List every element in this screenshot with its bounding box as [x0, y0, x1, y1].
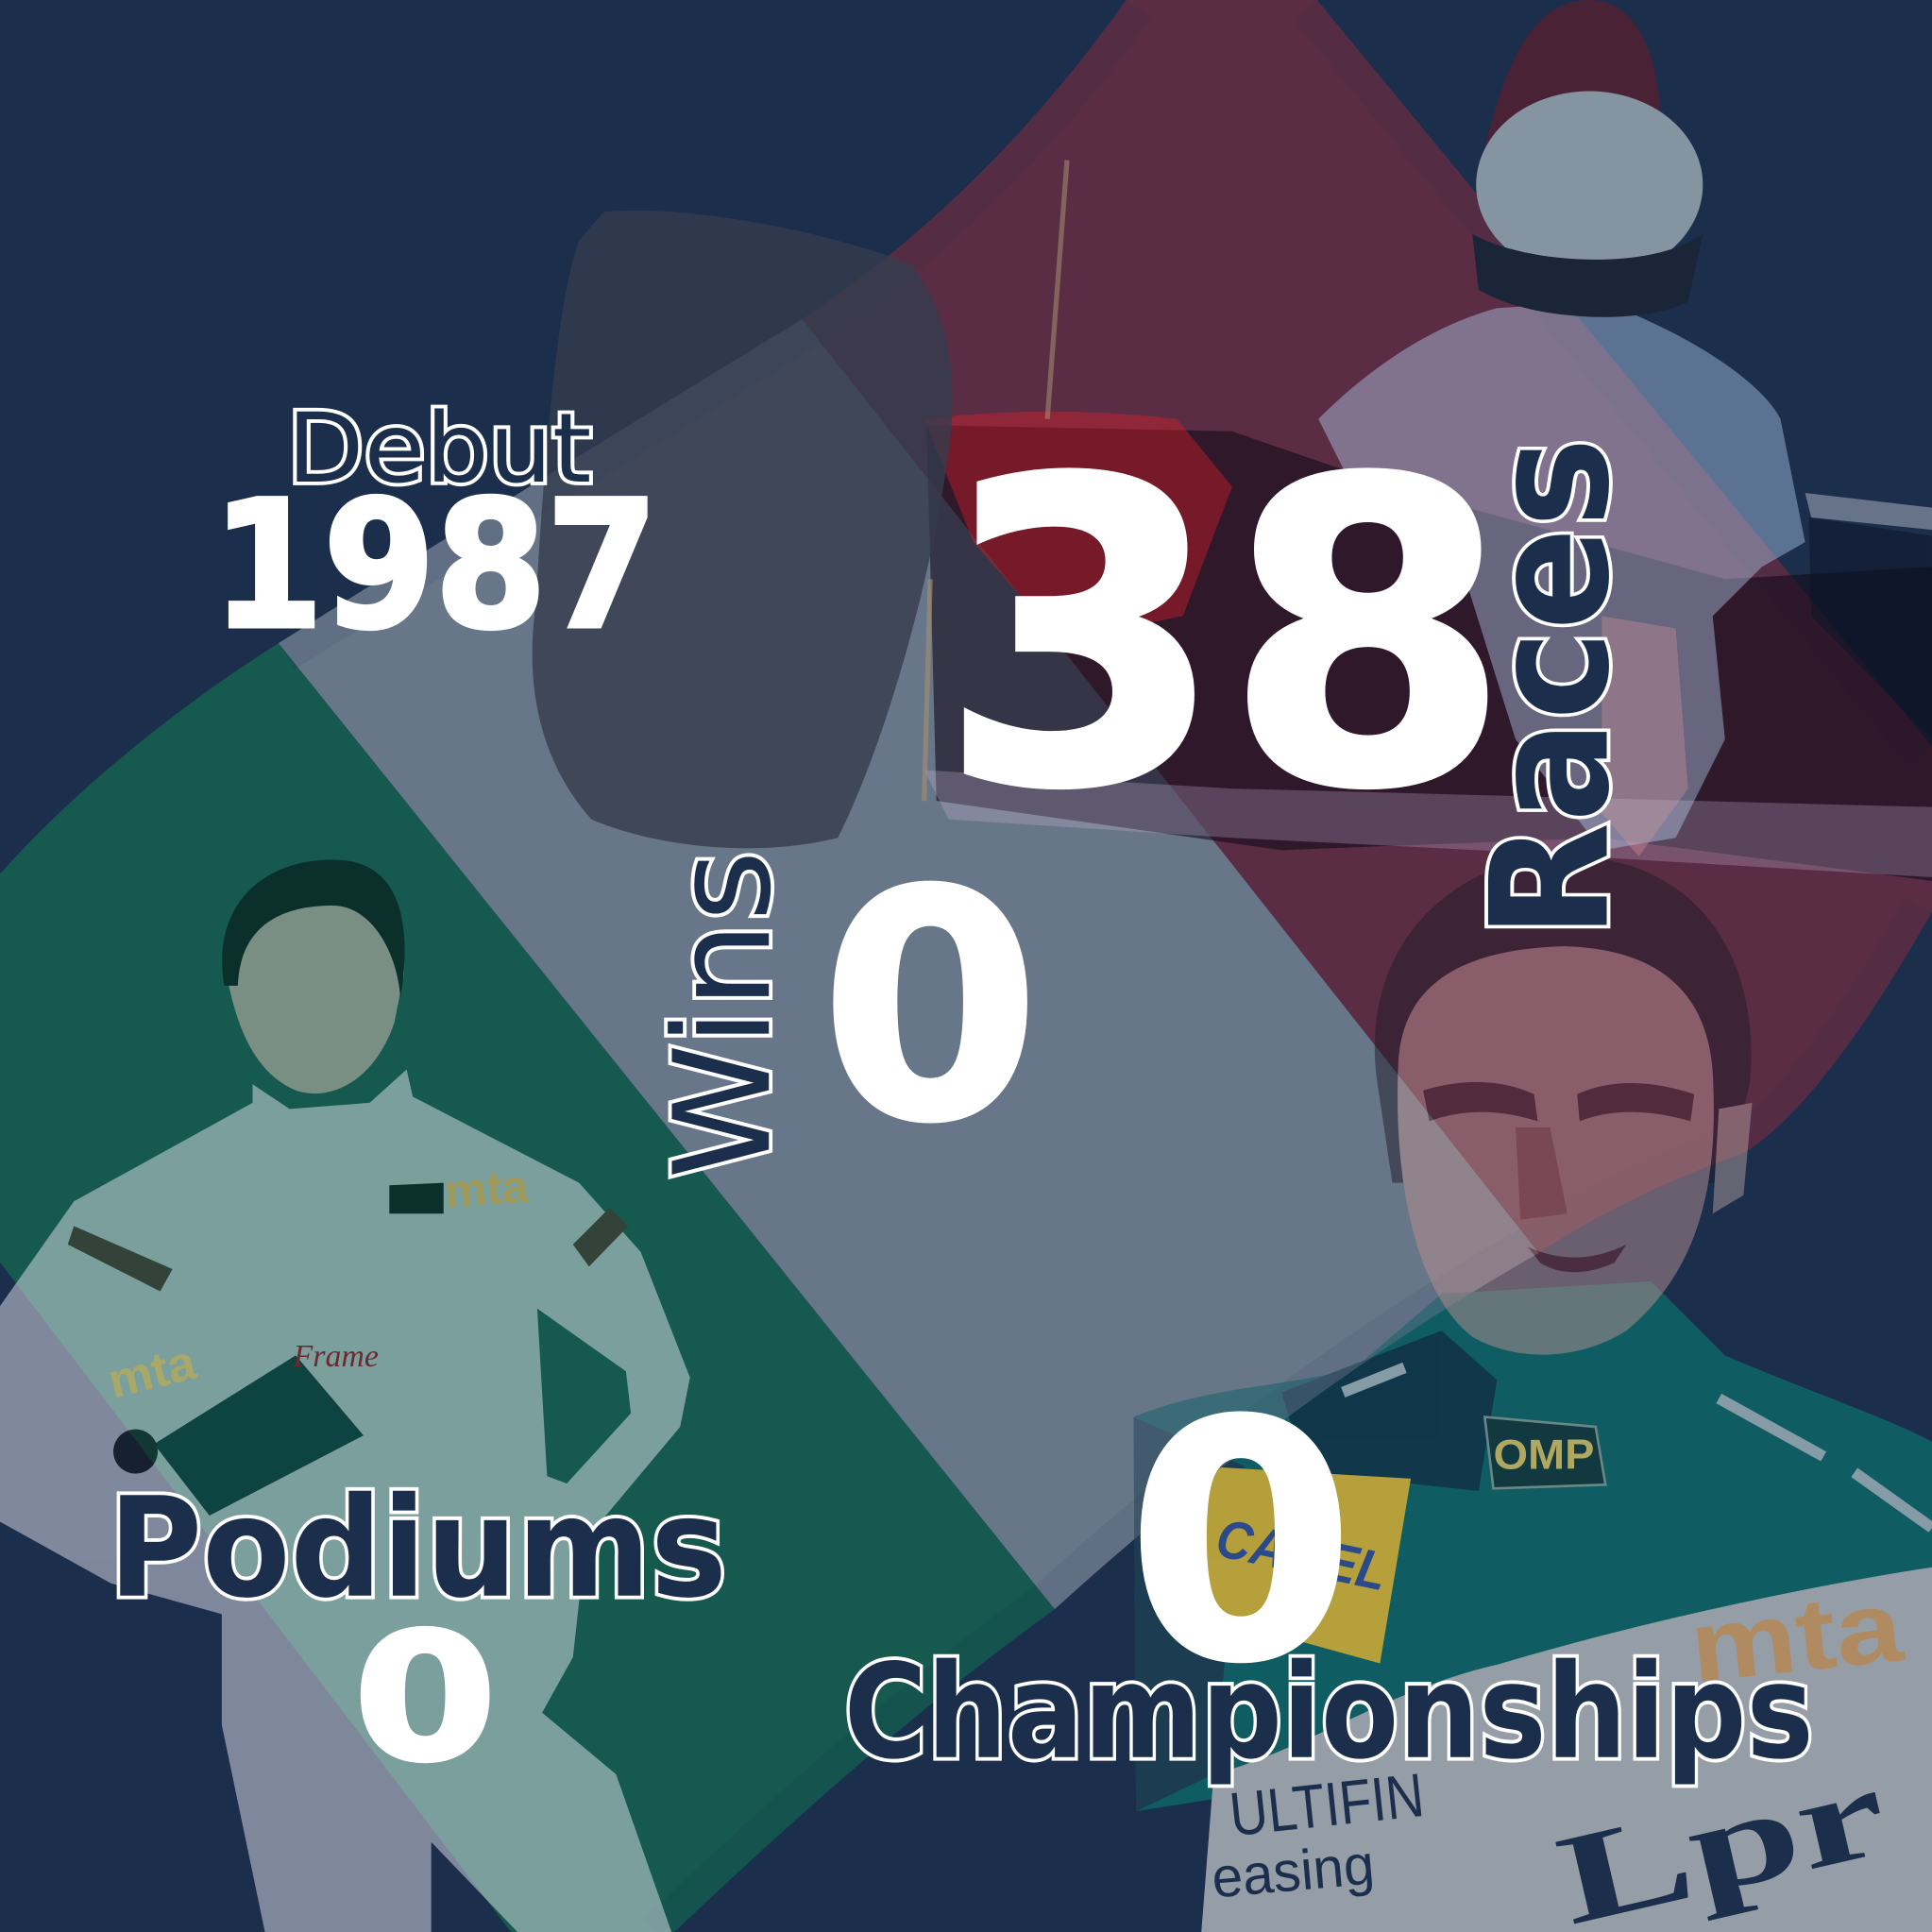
- driver body: [1318, 302, 1805, 850]
- helmet visor: [1472, 234, 1703, 317]
- portrait suit body: [1133, 1281, 1932, 1932]
- head: [224, 862, 404, 1093]
- stat: podiums number: 0: [353, 1596, 497, 1800]
- stat: debut year: 1987: [212, 464, 658, 668]
- tyre: [533, 211, 953, 848]
- photo: portrait head off flag: [1447, 1150, 1748, 1355]
- wing strut lower: [924, 579, 930, 801]
- portrait head off flag image: [1447, 1150, 1748, 1355]
- stat: championships label: Championships: [844, 1636, 1814, 1788]
- photo: portrait suit off flag: [1133, 1281, 1932, 1932]
- portrait sponsor OMP: OMP: [1493, 1432, 1594, 1478]
- arm patch right: [573, 1208, 628, 1266]
- sponsor script: Frame: [293, 1339, 379, 1374]
- rear wing: [1805, 493, 1932, 530]
- car body dark: [926, 425, 1932, 881]
- red front wing: [924, 412, 1232, 641]
- flag outer edge shade: [298, 545, 1414, 1577]
- helmet plume: [1484, 0, 1661, 148]
- flag: green band: [0, 643, 1055, 1932]
- rear dark: [1809, 517, 1932, 739]
- stat: races number: 38: [939, 392, 1511, 880]
- stat: races label: Races: [1456, 437, 1646, 939]
- flag: white band: [279, 319, 1539, 1609]
- hair: [222, 860, 405, 998]
- stat: debut label: Debut: [287, 394, 591, 505]
- portrait suit on flag: [1133, 1292, 1473, 1539]
- stat: podiums label: Podiums: [109, 1468, 727, 1629]
- mta logo left: [389, 1183, 444, 1213]
- red number panel: [1602, 616, 1688, 856]
- race suit: [0, 1070, 690, 1932]
- suit logo mta: mta: [443, 1160, 530, 1218]
- helmet: [1476, 92, 1703, 279]
- portrait head on flag image: [1375, 856, 1752, 1355]
- portrait sponsor mta: mta: [1685, 1568, 1909, 1703]
- photo: driver standing with helmet: [0, 860, 690, 1932]
- car lower nose band: [924, 771, 1932, 877]
- stat: championships number: 0: [1127, 1353, 1354, 1734]
- stat: wins number: 0: [821, 825, 1040, 1191]
- portrait sponsor leasing: easing: [1210, 1833, 1377, 1909]
- photo: racing car and driver: [533, 0, 1932, 881]
- stat: wins label: Wins: [646, 850, 801, 1179]
- helmet vent: [113, 1430, 158, 1474]
- front wing strut: [1047, 161, 1067, 419]
- photo: driver portrait, on flag: [1133, 1292, 1473, 1539]
- helmet visor: [154, 1355, 364, 1516]
- portrait sponsor Camel: CAMEL: [1212, 1508, 1393, 1602]
- photo: portrait head on flag: [1375, 856, 1752, 1355]
- helmet logo mta: mta: [103, 1335, 202, 1410]
- flag: red band: [802, 0, 1932, 1253]
- arm patch left: [68, 1226, 173, 1291]
- portrait sponsor Multifin: ULTIFIN: [1227, 1760, 1427, 1849]
